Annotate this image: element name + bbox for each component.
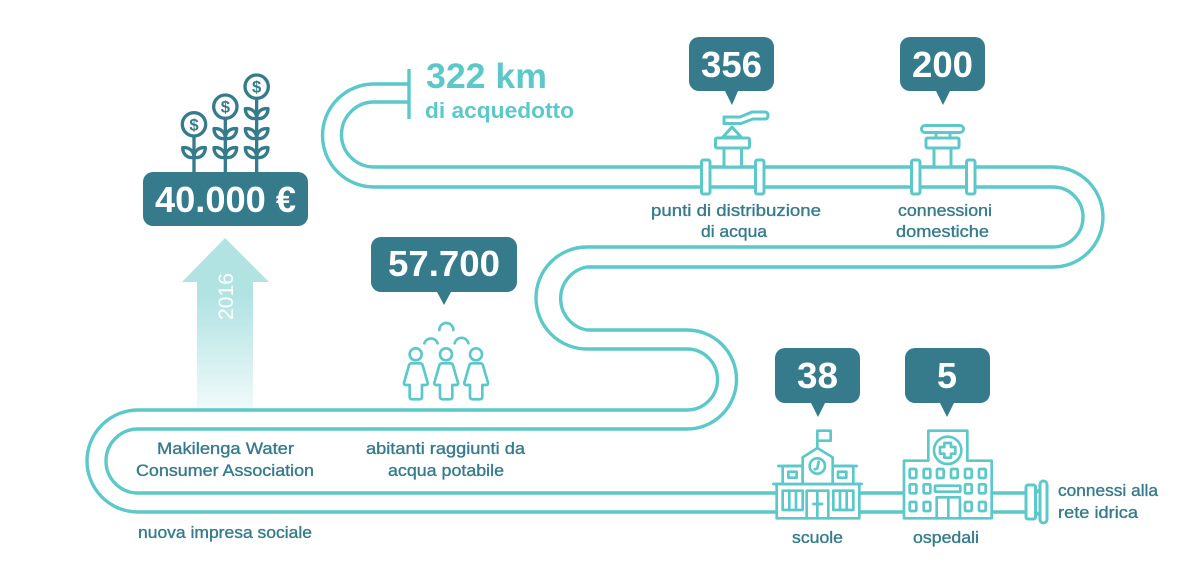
icon: tap valve: [702, 112, 768, 194]
label: connessi alla rete idrica: [1058, 482, 1159, 522]
label: connessioni domestiche: domestiche: [896, 223, 989, 241]
label: Makilenga Water Consumer Association: Consumer Association: [136, 462, 314, 480]
bubble: 5: 5: [937, 355, 957, 396]
bubble: 38: 38: [797, 355, 838, 396]
bubble: 38: [775, 348, 860, 417]
bubble: 57.700: 57.700: [388, 243, 500, 284]
bubble: 200: 200: [912, 44, 973, 85]
label: punti di distribuzione: di acqua: [701, 223, 768, 241]
bubble: 356: 356: [701, 44, 762, 85]
label: Makilenga Water Consumer Association: [136, 440, 314, 480]
pipeline: [87, 69, 1103, 512]
bubble: 356: [689, 37, 774, 105]
label: abitanti raggiunti: [366, 440, 526, 480]
label: connessi alla rete idrica: rete idrica: [1058, 504, 1139, 522]
icon: money plants: $: [221, 98, 231, 117]
heading: 322 km di acquedotto: 322 km: [426, 57, 547, 96]
label: connessioni domestiche: [896, 202, 992, 241]
label: Makilenga Water Consumer Association: Makilenga Water: [157, 440, 295, 458]
badge: 40.000 euro: 40.000 €: [155, 179, 296, 220]
label: connessioni domestiche: connessioni: [898, 202, 992, 220]
icon: money plants: [182, 75, 268, 172]
icon: school: [773, 431, 862, 518]
label: connessi alla rete idrica: connessi alla: [1058, 482, 1159, 500]
bubble: 5: [905, 348, 990, 417]
label: ospedali: ospedali: [913, 529, 979, 547]
label: abitanti raggiunti: acqua potabile: [388, 462, 504, 480]
arrow: 2016: [182, 238, 269, 409]
label: abitanti raggiunti: abitanti raggiunti da: [366, 440, 526, 458]
badge: 40.000 euro: [143, 172, 308, 226]
label: scuole: scuole: [792, 529, 843, 547]
label: punti di distribuzione: punti di distribuzione: [651, 202, 821, 220]
icon: money plants: $: [189, 115, 199, 134]
heading: 322 km di acquedotto: [425, 57, 574, 123]
bubble: 200: [900, 37, 985, 105]
heading: 322 km di acquedotto: di acquedotto: [425, 98, 574, 123]
label: punti di distribuzione: [651, 202, 821, 241]
icon: pipe end cap: [1026, 481, 1047, 523]
icon: hospital: [904, 431, 992, 518]
label: nuova impresa sociale: nuova impresa sociale: [138, 524, 312, 542]
bubble: 57.700: [371, 237, 517, 305]
icon: domestic valve: [912, 126, 975, 194]
icon: money plants: $: [252, 78, 262, 97]
arrow: 2016: 2016: [215, 273, 238, 320]
icon: people: [404, 323, 488, 399]
